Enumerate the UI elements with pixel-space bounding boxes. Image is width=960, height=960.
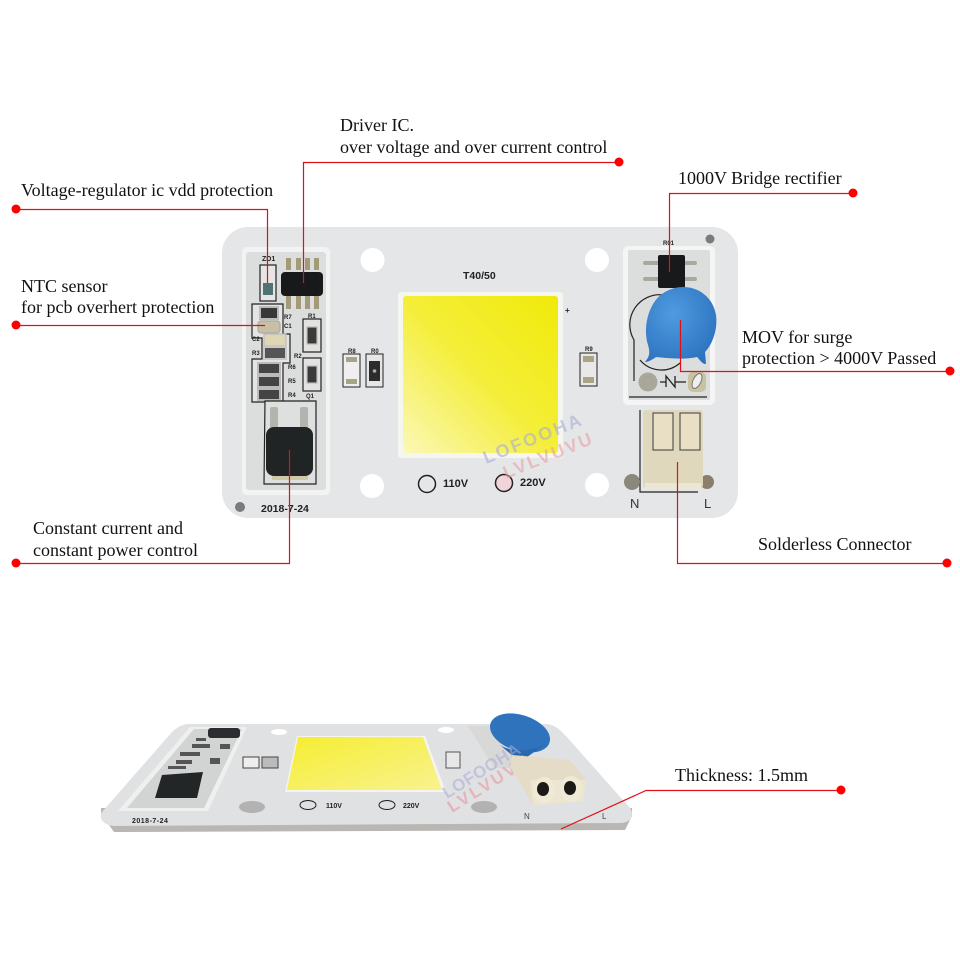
silkscreen component labels: R4 <box>288 393 296 399</box>
N and L terminal labels <box>630 496 711 511</box>
silkscreen component labels: R3 <box>252 351 260 357</box>
silkscreen component labels: R2 <box>294 354 302 360</box>
COB LED emitter <box>398 292 563 458</box>
rectifier label: R01 <box>663 241 675 247</box>
callout: bridge rectifier <box>670 168 858 272</box>
callout: NTC sensor <box>12 276 265 330</box>
bridge rectifier chip <box>643 255 697 288</box>
voltage marks: 110V <box>326 803 342 810</box>
callout: solderless connector <box>678 462 952 568</box>
side view rectifier panel <box>468 726 520 768</box>
rectifier and MOV panel <box>623 241 716 405</box>
date code: 2018-7-24 <box>132 818 168 825</box>
Q1 power transistor <box>264 401 316 484</box>
N L labels <box>524 812 607 821</box>
callout: bridge rectifier: 1000V Bridge rectifier <box>678 168 842 188</box>
left driver circuit panel <box>242 247 330 495</box>
voltage marks <box>300 800 420 810</box>
callout: solderless connector: Solderless Connector <box>758 534 911 554</box>
MOV leads and screws <box>638 372 706 392</box>
callout: constant current <box>12 450 290 568</box>
watermark: LVLVUVU <box>500 429 595 483</box>
silkscreen component labels: C1 <box>284 324 292 330</box>
side view watermark: LVLVUVU <box>444 752 532 816</box>
SMD resistors and capacitors <box>252 304 321 402</box>
board edge <box>101 808 632 832</box>
callout: thickness <box>561 765 846 829</box>
mounting holes <box>271 727 454 735</box>
silkscreen outline <box>629 295 707 397</box>
small resistors R8 R0: R0 <box>371 349 379 355</box>
callout: thickness: Thickness: 1.5mm <box>675 765 808 785</box>
date code: 2018-7-24 <box>261 503 309 515</box>
voltage selector marks <box>418 474 546 492</box>
small resistors R8 R0: R8 <box>348 349 356 355</box>
silkscreen component labels: Q1 <box>306 394 315 400</box>
resistor R9 <box>580 347 597 386</box>
N and L terminal labels: N <box>630 496 639 511</box>
callout: MOV: protection > 4000V Passed <box>742 348 936 368</box>
COB LED side view <box>285 736 446 792</box>
solderless connector <box>624 410 714 492</box>
main LED board, top view <box>222 227 738 518</box>
N and L terminal labels: L <box>704 496 711 511</box>
side view LED board <box>101 706 632 832</box>
voltage selector marks: 110V <box>443 478 469 490</box>
callout: MOV <box>680 320 954 376</box>
driver circuit area <box>118 727 247 811</box>
fiducial dot top right <box>706 234 714 244</box>
silkscreen component labels: C2 <box>252 337 260 343</box>
MOV blue varistor <box>645 287 716 364</box>
polarity mark: + <box>565 306 570 315</box>
N L labels: L <box>602 812 607 821</box>
callout: voltage regulator: Voltage-regulator ic vdd protection <box>21 180 273 200</box>
resistor R9: R9 <box>585 347 593 353</box>
callout: NTC sensor: NTC sensor <box>21 276 108 296</box>
N L labels: N <box>524 812 530 821</box>
side view watermark: LOFOOHA <box>439 740 524 802</box>
side view connector <box>510 755 586 805</box>
small resistors R8 R0 <box>343 349 383 387</box>
small resistor R9 <box>446 752 460 768</box>
model label: T40/50 <box>463 270 496 282</box>
ZD1 zener diode: ZD1 <box>262 256 275 263</box>
board substrate <box>222 227 738 518</box>
callout: driver IC: over voltage and over current control <box>340 137 607 157</box>
ZD1 zener diode <box>260 256 276 301</box>
driver IC chip <box>281 258 323 309</box>
callout: MOV: MOV for surge <box>742 327 852 347</box>
silkscreen component labels: R5 <box>288 379 296 385</box>
fiducial dot <box>235 502 245 512</box>
silkscreen component labels: R1 <box>308 314 316 320</box>
voltage marks: 220V <box>403 803 420 810</box>
callout: NTC sensor: for pcb overhert protection <box>21 297 214 317</box>
board top surface <box>101 724 632 826</box>
callout: constant current: constant power control <box>33 540 198 560</box>
watermark: LOFOOHA <box>480 410 584 468</box>
callout: driver IC <box>304 115 624 283</box>
voltage selector marks: 220V <box>520 477 546 489</box>
callout: constant current: Constant current and <box>33 518 183 538</box>
callout: voltage regulator <box>12 180 273 283</box>
side view MOV varistor <box>485 706 555 762</box>
silkscreen component labels: R7 <box>284 315 292 321</box>
callout: driver IC: Driver IC. <box>340 115 414 135</box>
mounting holes <box>360 248 609 498</box>
silkscreen component labels: R6 <box>288 365 296 371</box>
silkscreen component labels <box>252 314 316 400</box>
small resistors <box>243 757 278 768</box>
